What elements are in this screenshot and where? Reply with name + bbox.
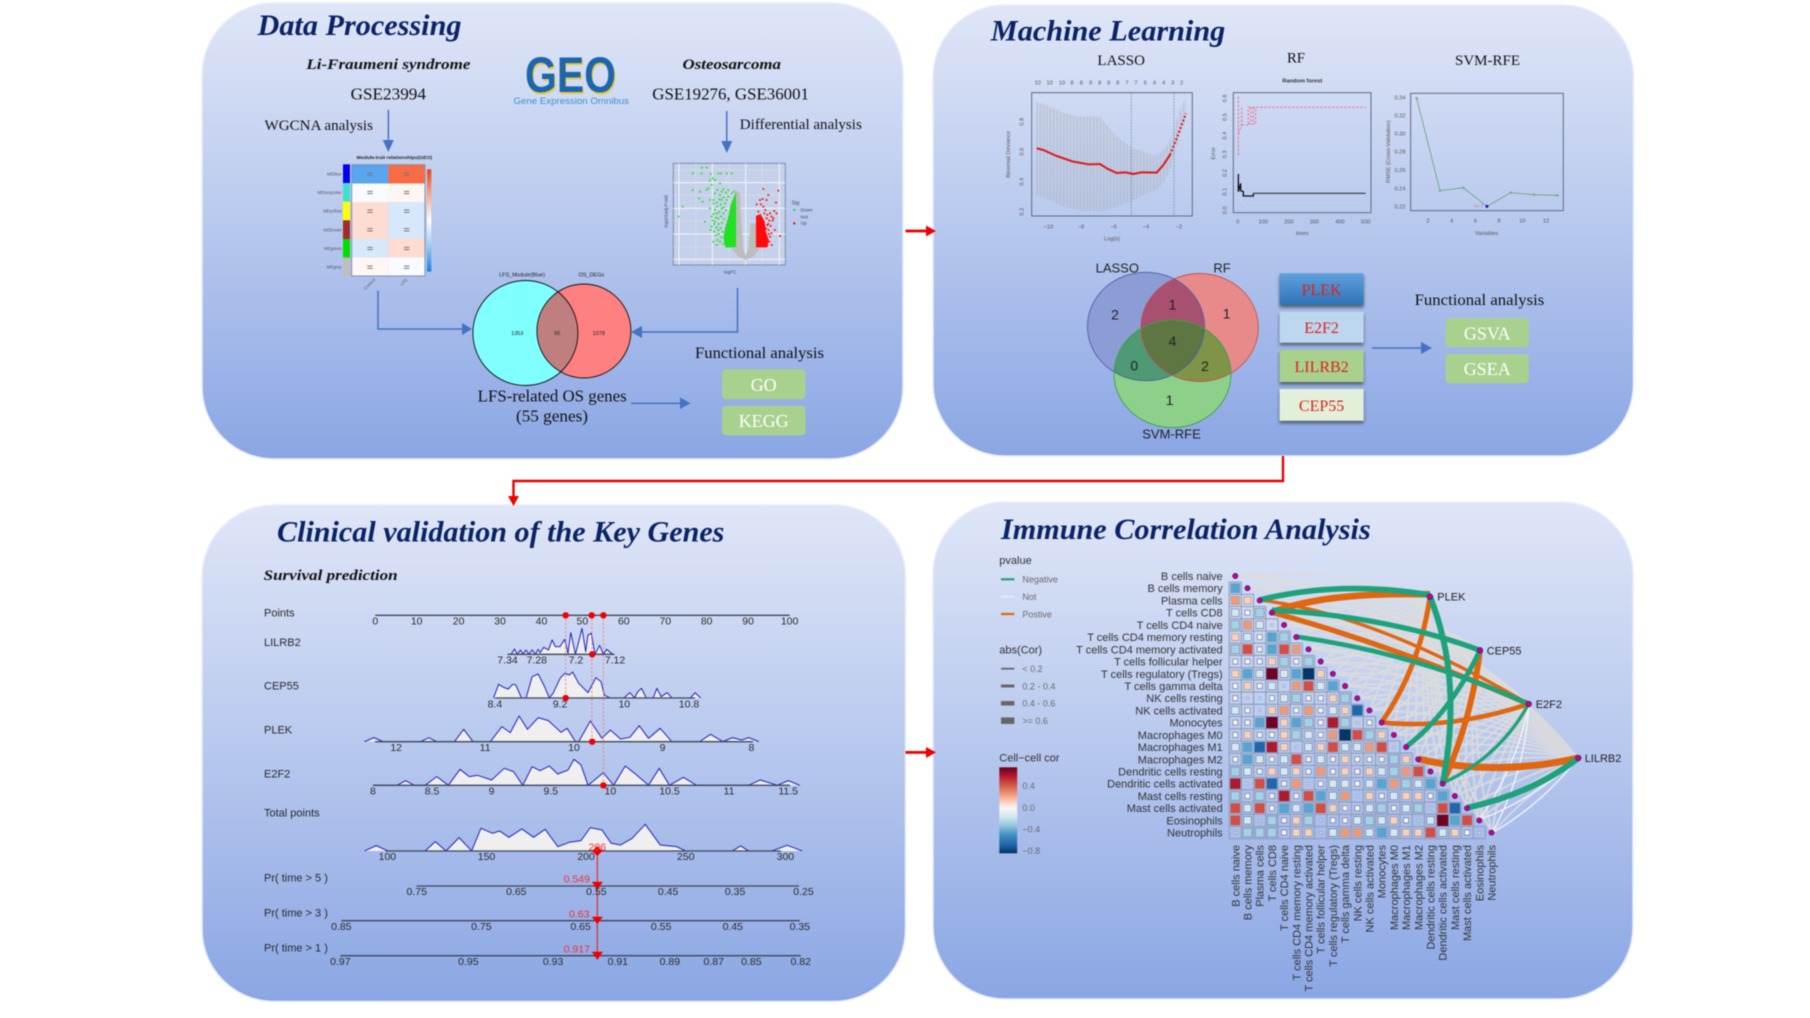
chart: nomogram: 8 [748,742,754,754]
box: PLEK: PLEK [1302,282,1342,299]
heading: Machine Learning: Machine Learning [990,15,1225,48]
text: heatmap column labels: T cells gamma delta [1340,844,1352,943]
chart: nomogram: 0.25 [793,886,814,898]
legend: absolute correlation: >= 0.6 [1022,716,1048,726]
text: heatmap row labels: B cells memory [1148,583,1223,595]
chart: nomogram: 10 [568,742,580,754]
chart: nomogram: 50 [577,615,588,627]
chart: LASSO cross-validation: 7 [1125,81,1129,87]
text: heatmap column labels: Macrophages M2 [1413,845,1425,930]
text: Li-Fraumeni syndrome: Li-Fraumeni syndrome [305,57,471,73]
chart: module-trait heatmap: MEgreen [324,246,342,251]
chart: LASSO cross-validation: 7 [1134,81,1138,87]
arrow: volcano to Venn [631,288,738,338]
text: heatmap row labels: T cells CD8 [1166,608,1223,620]
chart: Random forest error: 0.3 [1223,150,1229,158]
panel: Clinical validation of the Key Genes [202,505,906,1002]
chart: nomogram: 0 [372,615,378,627]
chart: Random forest error: 0.5 [1223,113,1229,121]
text: heatmap column labels: Monocytes [1377,845,1389,898]
box: PLEK [1280,273,1364,305]
chart: three-set Venn diagram: 1 [1166,392,1174,408]
chart: nomogram: 0.917 [564,944,590,956]
icon: GEO logo: Gene Expression Omnibus [514,96,629,107]
chart: nomogram: 0.85 [331,921,352,933]
text: heatmap column labels: NK cells resting [1352,845,1364,921]
chart: Random forest error: 400 [1335,219,1345,225]
text: gene node labels: PLEK [1437,592,1466,604]
heading: Immune Correlation Analysis: Immune Correlation Analysis [1000,513,1371,546]
chart: LASSO cross-validation: −10 [1044,225,1053,231]
chart: LASSO cross-validation: −6 [1110,225,1117,231]
chart: nomogram: 10 [411,615,423,627]
legend: p-value [999,555,1058,620]
chart: volcano plot: logFC [724,270,737,275]
chart: nomogram: 206 [589,842,606,854]
text: heatmap row labels: Macrophages M1 [1138,742,1223,754]
chart: LASSO cross-validation: 0.6 [1020,148,1026,156]
chart: module-trait heatmap: Module-trait relationships(GEO) [357,155,432,161]
chart: network nodes [1233,573,1581,835]
chart: nomogram: 0.549 [564,874,590,886]
chart: Venn diagram of LFS module and OS DEGs: 1078 [593,331,605,337]
chart: LASSO cross-validation: 0.4 [1020,178,1026,186]
chart: nomogram: 0.91 [608,956,628,968]
chart: nomogram: Pr( time > 5 ) [264,873,328,885]
arrow: Data Processing to Machine Learning [906,226,936,236]
chart: nomogram: 0.55 [651,921,671,933]
chart: Random forest error: Random forest [1282,79,1322,85]
chart: nomogram: 250 [677,851,695,863]
chart: nomogram: 0.75 [406,886,427,898]
chart: Random forest error [1211,79,1371,237]
chart: Random forest error: 0.1 [1223,188,1229,196]
chart: Random forest error: 0.6 [1223,94,1229,102]
arrow: Machine Learning to Clinical validation [508,456,1283,506]
text: gene node labels: LILRB2 [1585,753,1621,765]
legend: absolute correlation: 0.2 - 0.4 [1022,681,1055,691]
text: heatmap row labels: T cells CD4 memory resting [1087,632,1223,644]
box: CEP55: CEP55 [1299,398,1344,415]
box: KEGG: KEGG [739,411,789,431]
chart: LASSO cross-validation: 8 [1089,81,1092,87]
legend: cell-cell correlation colour bar: −0.8 [1022,846,1040,856]
text: heatmap row labels: T cells CD4 naive [1137,620,1223,632]
text: heatmap row labels: Plasma cells [1161,595,1223,607]
chart: three-set Venn diagram: 2 [1111,306,1119,322]
chart: volcano plot: Not [801,214,809,219]
text: heatmap column labels: Dendritic cells resting [1426,845,1438,950]
chart: Venn diagram of LFS module and OS DEGs: 1353 [511,331,523,337]
text: LFS-related OS genes: (55 genes) [516,407,588,426]
chart: SVM-RFE RMSE: 2 [1426,219,1430,225]
box: GO [722,369,806,399]
chart: three-set Venn diagram: 4 [1169,333,1177,349]
text: WGCNA analysis: WGCNA analysis [264,118,373,134]
chart: three-set Venn diagram [1088,261,1258,441]
chart: nomogram: 9 [660,742,666,754]
text: Survival prediction: Survival prediction [264,568,398,584]
text: heatmap row labels: T cells follicular helper [1114,656,1223,668]
chart: LASSO cross-validation: Log(λ) [1104,236,1120,242]
chart: three-set Venn diagram: RF [1213,261,1231,276]
chart: LASSO cross-validation: 4 [1162,81,1165,87]
arrow: LFS data to WGCNA heatmap [383,110,394,152]
chart: volcano plot: Up [801,221,807,226]
text: heatmap column labels: Neutrophils [1486,845,1498,901]
chart: nomogram [264,608,814,968]
chart: LASSO cross-validation: 8 [1080,81,1083,87]
box: E2F2 [1280,312,1364,343]
text: heatmap row labels: Dendritic cells activated [1107,779,1223,791]
chart: nomogram: 150 [478,851,495,863]
text: heatmap column labels: Dendritic cells activated [1438,845,1450,961]
chart: Random forest error: 0.2 [1223,169,1229,177]
chart: Random forest error: trees [1296,231,1309,237]
text: heatmap row labels: T cells regulatory (Tregs) [1101,669,1223,681]
heading: Clinical validation of the Key Genes: Clinical validation of the Key Genes [277,516,724,549]
chart: volcano plot: Sig [792,200,799,206]
chart: Random forest error: 0 [1236,219,1239,225]
chart: nomogram: 0.63 [569,909,590,921]
chart: nomogram: 7.34 [497,655,518,667]
chart: module-trait heatmap: Control [363,277,376,291]
chart: three-set Venn diagram: 0 [1130,358,1138,374]
text: heatmap row labels: NK cells resting [1146,693,1223,705]
legend: cell-cell correlation colour bar: Cell−cell cor [999,752,1060,764]
chart: LASSO cross-validation: 10 [1059,81,1065,87]
chart: nomogram: 9 [489,786,495,798]
icon: GEO logo: GEO [525,47,616,103]
text: heatmap row labels: Monocytes [1169,718,1223,730]
chart: SVM-RFE RMSE: N=7 [1474,204,1483,210]
chart: LASSO cross-validation: 8 [1116,81,1119,87]
chart: SVM-RFE RMSE: 4 [1450,219,1453,225]
text: heatmap column labels: T cells CD4 naive [1279,845,1291,931]
text: heatmap column labels [1230,844,1498,992]
chart: nomogram: CEP55 [264,681,299,693]
box: LILRB2 [1280,350,1364,382]
chart: SVM-RFE RMSE: RMSE (Cross-Validation) [1386,120,1392,183]
arrow: OS data to volcano plot [721,111,732,153]
chart: SVM-RFE RMSE: 0.24 [1394,186,1405,192]
chart: nomogram: 80 [701,615,713,627]
text: heatmap row labels: T cells gamma delta [1124,681,1224,693]
panel: Data Processing [202,3,903,459]
chart: nomogram: 9.2 [553,698,567,710]
chart: nomogram: 70 [659,615,671,627]
text: heatmap column labels: Macrophages M1 [1401,845,1413,930]
text: Functional analysis: Functional analysis [695,345,824,362]
chart: LASSO cross-validation: −8 [1078,225,1084,231]
arrow: heatmap to Venn [378,291,472,335]
chart: nomogram: 10 [605,786,616,798]
chart: LASSO cross-validation: 4 [1153,81,1156,87]
chart: nomogram: 0.93 [543,956,563,968]
chart: nomogram: 0.85 [741,956,762,968]
box: GO: GO [751,375,777,395]
chart: nomogram: 0.97 [330,956,351,968]
chart: nomogram: 60 [618,615,630,627]
text: heatmap column labels: T cells follicular helper [1316,845,1328,954]
text: heatmap column labels: Eosinophils [1474,845,1486,901]
chart: SVM-RFE RMSE: Variables [1475,231,1498,237]
text: heatmap row labels: B cells naive [1161,571,1223,583]
text: heatmap row labels: Macrophages M2 [1138,754,1223,766]
arrow: Clinical validation to Immune Correlation [906,747,936,758]
text: heatmap column labels: Mast cells resting [1450,845,1462,930]
chart: LASSO cross-validation: 10 [1035,81,1041,87]
text: heatmap column labels: Plasma cells [1255,845,1267,907]
chart: LASSO cross-validation: 0.2 [1020,208,1026,216]
chart: nomogram: 7.12 [605,655,625,667]
legend: cell-cell correlation colour bar: 0.0 [1022,803,1035,813]
chart: LASSO cross-validation: −2 [1176,225,1182,231]
chart: nomogram: Points [264,608,295,620]
chart: nomogram: 40 [536,615,547,627]
legend: cell-cell correlation colour bar: −0.4 [1022,824,1040,834]
text: SVM-RFE: SVM-RFE [1455,53,1520,69]
text: LASSO: LASSO [1097,53,1145,69]
chart: nomogram: 100 [379,851,396,863]
chart: nomogram: 9.5 [543,786,558,798]
heading: Data Processing: Data Processing [256,9,462,42]
text: gene node labels [1437,592,1621,765]
chart: nomogram: 30 [494,615,506,627]
chart: nomogram: 10 [618,698,630,710]
chart: Random forest error: 0.4 [1223,132,1229,140]
chart: nomogram: 20 [453,615,465,627]
chart: nomogram: 0.55 [586,886,607,898]
text: LFS-related OS genes [478,387,627,426]
box: GSEA [1446,354,1529,383]
chart: LASSO cross-validation: 8 [1107,81,1110,87]
chart: Venn diagram of LFS module and OS DEGs: LFS_Module(Blue) [499,272,545,278]
legend: p-value: Negative [1022,574,1058,584]
chart: nomogram: 8.5 [425,786,440,798]
chart: immune cell correlation heatmap [1229,582,1485,839]
text: Functional analysis: Functional analysis [1415,292,1544,309]
text: heatmap column labels: B cells naive [1230,845,1242,907]
chart: Random forest error: Error [1211,147,1217,160]
chart: nomogram: 7.2 [569,655,583,667]
chart: nomogram: 0.82 [790,956,811,968]
chart: nomogram: 10.5 [659,786,680,798]
chart: Venn diagram of LFS module and OS DEGs: 55 [554,331,560,337]
chart: nomogram: 0.95 [458,956,479,968]
chart: module-trait heatmap: MEbrown [323,227,342,232]
chart: nomogram: 0.87 [703,956,724,968]
panel: Machine Learning [933,5,1634,456]
chart: Random forest error: 500 [1361,219,1370,225]
legend: cell-cell correlation colour bar: 0.4 [1022,781,1035,791]
chart: nomogram: 0.35 [790,921,810,933]
chart: Venn diagram of LFS module and OS DEGs [473,272,631,386]
chart: three-set Venn diagram: LASSO [1096,261,1139,276]
chart: SVM-RFE RMSE: 0.32 [1394,113,1405,119]
text: heatmap column labels: NK cells activated [1364,845,1376,932]
box: GSEA: GSEA [1464,359,1511,379]
chart: nomogram: 12 [390,742,402,754]
chart: SVM-RFE RMSE: 12 [1543,219,1549,225]
chart: SVM-RFE RMSE: 0.22 [1394,205,1405,211]
chart: Random forest error: 0.0 [1223,206,1229,214]
chart: three-set Venn diagram: SVM-RFE [1142,426,1201,441]
chart: nomogram: PLEK [264,724,293,736]
chart: module-trait heatmap: LFS [399,277,408,287]
chart: gene-immune cell network links [1235,574,1578,833]
chart: LASSO cross-validation: Binomial Deviance [1006,131,1012,178]
chart: volcano plot: -log10(adj.P.Val) [663,194,668,229]
chart: nomogram: 200 [577,851,595,863]
box: LILRB2: LILRB2 [1294,359,1349,376]
text: gene node labels: CEP55 [1487,645,1522,657]
chart: nomogram: 0.35 [725,886,745,898]
text: heatmap column labels: T cells regulatory (Tregs) [1328,845,1340,967]
chart: nomogram: 7.28 [527,655,547,667]
legend: absolute correlation [999,645,1055,726]
chart: three-set Venn diagram: 1 [1169,296,1177,312]
chart: SVM-RFE RMSE: 6 [1474,219,1477,225]
arrow: genes to functional analysis [631,398,690,409]
text: heatmap column labels: Macrophages M0 [1389,845,1401,930]
text: heatmap row labels: NK cells activated [1135,705,1223,717]
chart: Venn diagram of LFS module and OS DEGs: OS_DEGs [578,272,604,278]
text: heatmap row labels: Mast cells activated [1127,803,1223,815]
legend: p-value: pvalue [999,555,1032,567]
text: heatmap row labels: Neutrophils [1167,828,1223,840]
legend: cell-cell correlation colour bar [999,752,1060,856]
text: heatmap row labels: Eosinophils [1166,815,1223,827]
chart: nomogram: 11 [480,742,491,754]
text: heatmap column labels: B cells memory [1242,845,1254,920]
chart: Random forest error: 200 [1284,219,1294,225]
text: heatmap column labels: T cells CD4 memory resting [1291,845,1303,980]
box: E2F2: E2F2 [1304,320,1339,337]
chart: nomogram: 0.89 [660,956,680,968]
text: Osteosarcoma: Osteosarcoma [682,57,782,73]
text: heatmap column labels: T cells CD8 [1267,845,1279,902]
chart: three-set Venn diagram: 2 [1201,358,1209,374]
chart: SVM-RFE RMSE: 0.26 [1394,168,1405,174]
box: GSVA: GSVA [1464,324,1511,344]
chart: nomogram: 11 [724,786,735,798]
chart: SVM-RFE RMSE [1386,93,1563,237]
chart: nomogram: 0.75 [471,921,492,933]
chart: nomogram: LILRB2 [264,637,301,649]
chart: nomogram: 0.65 [570,921,591,933]
box: KEGG [722,406,806,435]
text: heatmap row labels: T cells CD4 memory activated [1076,644,1223,656]
legend: p-value: Not [1022,592,1037,602]
chart: nomogram: Total points [264,807,320,819]
text: GSE23994: GSE23994 [351,84,426,103]
chart: volcano plot: Down [801,208,813,213]
chart: nomogram: 100 [781,615,799,627]
chart: LASSO cross-validation: 3 [1171,81,1174,87]
text: heatmap row labels: Macrophages M0 [1138,730,1223,742]
chart: module-trait heatmap: MEyellow [323,209,343,214]
arrow: genes to GSVA and GSEA [1372,342,1432,354]
legend: absolute correlation: abs(Cor) [999,645,1042,657]
chart: LASSO cross-validation: −4 [1143,225,1149,231]
chart: nomogram: E2F2 [264,768,290,780]
chart: module-trait heatmap: MEturquoise [317,190,342,195]
chart: module-trait heatmap: MEgrey [327,265,342,270]
text: heatmap column labels: T cells CD4 memory activated [1304,845,1316,992]
chart: Random forest error: 300 [1310,219,1319,225]
chart: module-trait heatmap [317,155,432,291]
chart: nomogram: 90 [742,615,754,627]
chart: LASSO cross-validation: 2 [1180,81,1183,87]
text: heatmap row labels: Mast cells resting [1138,791,1223,803]
panel: Immune Correlation Analysis [933,502,1633,999]
chart: nomogram: 8.4 [488,698,502,710]
text: GSE19276, GSE36001: GSE19276, GSE36001 [652,84,809,103]
chart: LASSO cross-validation: 0.8 [1020,118,1026,126]
text: RF: RF [1287,51,1305,67]
text: heatmap row labels: Dendritic cells resting [1118,766,1223,778]
text: gene node labels: E2F2 [1536,699,1562,711]
chart: SVM-RFE RMSE: 8 [1497,219,1501,225]
chart: nomogram: 0.45 [723,921,743,933]
text: Differential analysis: Differential analysis [740,117,862,133]
chart: LASSO cross-validation [1006,81,1192,242]
chart: SVM-RFE RMSE: 0.34 [1394,95,1405,101]
box: CEP55 [1280,389,1364,421]
chart: nomogram: 300 [777,851,794,863]
chart: nomogram: 0.45 [658,886,678,898]
chart: SVM-RFE RMSE: 10 [1519,219,1525,225]
icon: GEO logo: GEO [526,49,617,105]
legend: p-value: Postive [1022,610,1052,620]
chart: LASSO cross-validation: 8 [1098,81,1101,87]
chart: LASSO cross-validation: 8 [1070,81,1074,87]
chart: nomogram: Pr( time > 3 ) [264,908,328,920]
chart: nomogram: 10.8 [679,698,699,710]
box: GSVA [1446,318,1529,347]
chart: module-trait heatmap: MEblue [327,172,342,177]
chart: SVM-RFE RMSE: 0.28 [1394,150,1405,156]
chart: nomogram: 11.5 [778,786,798,798]
chart: SVM-RFE RMSE: 0.30 [1394,131,1405,137]
chart: LASSO cross-validation: 6 [1144,81,1147,87]
legend: absolute correlation: 0.4 - 0.6 [1022,699,1055,709]
text: LFS-related OS genes: LFS-related OS genes [478,387,627,406]
chart: LASSO cross-validation: 10 [1047,81,1053,87]
text: heatmap column labels: Mast cells activated [1462,845,1474,941]
chart: nomogram: 8 [370,786,376,798]
chart: nomogram: Pr( time > 1 ) [264,943,328,955]
chart: three-set Venn diagram: 1 [1223,306,1231,322]
chart: nomogram: 0.65 [506,886,527,898]
legend: absolute correlation: < 0.2 [1022,664,1043,674]
chart: volcano plot [663,163,813,275]
text: heatmap row labels [1076,571,1224,840]
chart: Random forest error: 100 [1259,219,1268,225]
